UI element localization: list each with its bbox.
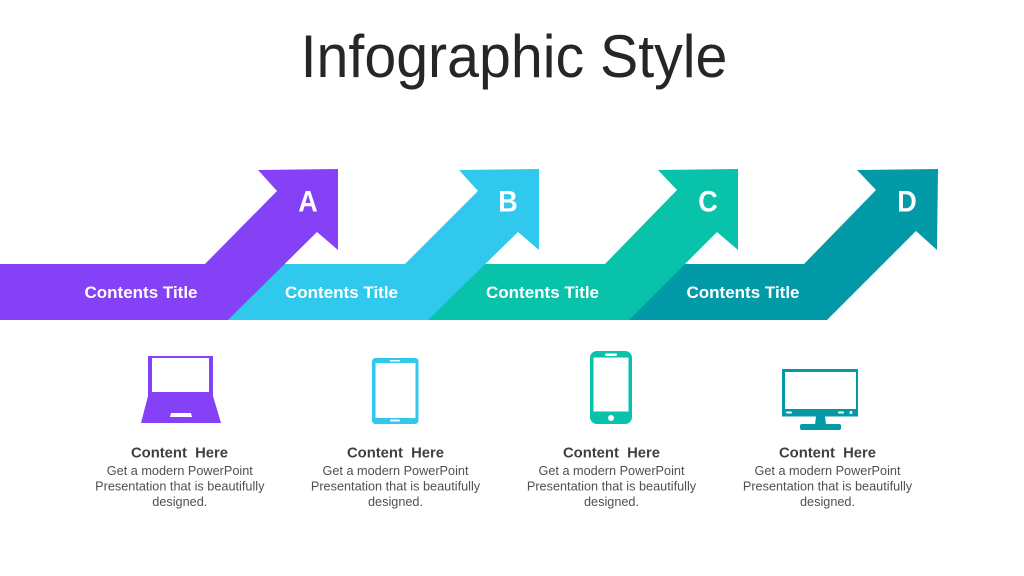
arrow C label: Contents Title bbox=[486, 283, 599, 302]
icon: laptop bbox=[141, 356, 221, 423]
body 4: designed. bbox=[800, 495, 855, 509]
arrow D letter: D bbox=[897, 185, 917, 219]
arrow A label: Contents Title bbox=[84, 283, 198, 302]
body 4 bbox=[743, 464, 913, 509]
text block 1 bbox=[95, 446, 265, 509]
arrow C bbox=[400, 169, 738, 320]
icon: desktop monitor bbox=[782, 369, 858, 430]
text block 4 bbox=[743, 446, 913, 509]
heading 3: Content Here bbox=[563, 446, 660, 462]
body 2: designed. bbox=[368, 495, 423, 509]
body 1: designed. bbox=[152, 495, 207, 509]
icon: tablet bbox=[372, 358, 418, 424]
text block 3 bbox=[527, 446, 697, 509]
arrow B bbox=[200, 169, 539, 320]
body 4: Presentation that is beautifully bbox=[743, 480, 913, 494]
body 3: designed. bbox=[584, 495, 639, 509]
arrow D bbox=[600, 169, 938, 320]
body 2: Presentation that is beautifully bbox=[311, 480, 481, 494]
heading 1: Content Here bbox=[131, 446, 228, 462]
body 2 bbox=[311, 464, 481, 509]
icon: smartphone bbox=[590, 351, 632, 424]
body 3: Presentation that is beautifully bbox=[527, 480, 697, 494]
body 1: Presentation that is beautifully bbox=[95, 480, 265, 494]
arrow B label: Contents Title bbox=[285, 283, 398, 302]
text block 2 bbox=[311, 446, 481, 509]
arrow A letter: A bbox=[298, 185, 318, 219]
heading 2: Content Here bbox=[347, 446, 444, 462]
body 2: Get a modern PowerPoint bbox=[323, 464, 469, 478]
body 3 bbox=[527, 464, 697, 509]
arrow D label: Contents Title bbox=[686, 283, 800, 302]
body 3: Get a modern PowerPoint bbox=[539, 464, 685, 478]
body 4: Get a modern PowerPoint bbox=[755, 464, 901, 478]
arrow B letter: B bbox=[498, 185, 518, 219]
body 1: Get a modern PowerPoint bbox=[107, 464, 253, 478]
arrow C letter: C bbox=[698, 185, 718, 219]
body 1 bbox=[95, 464, 265, 509]
heading 4: Content Here bbox=[779, 446, 876, 462]
title: Infographic Style bbox=[301, 24, 727, 90]
arrow A bbox=[0, 169, 338, 320]
